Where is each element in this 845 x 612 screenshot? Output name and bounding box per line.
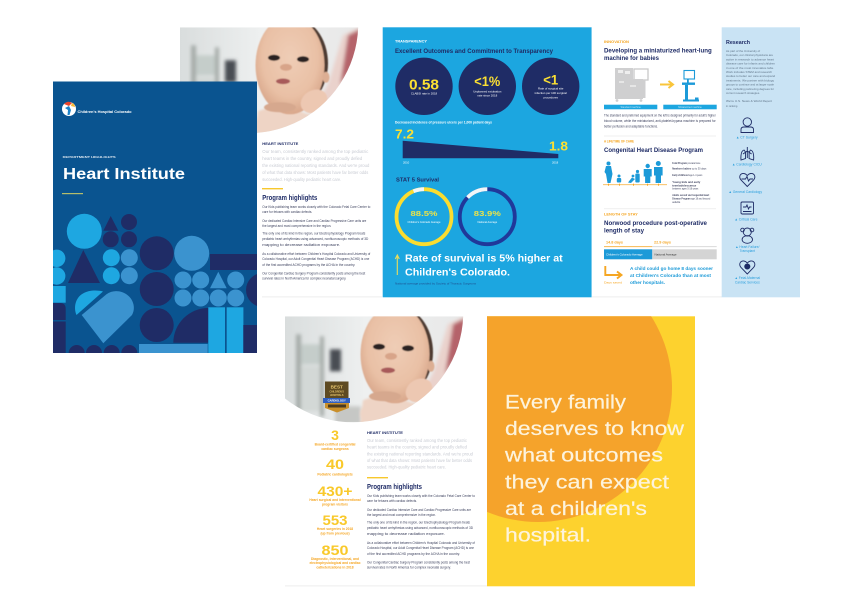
intro text: of what that data shows: Most patients have far better odds [262,170,369,175]
stat circle: less than 1 [522,58,579,115]
research body text: groups to continue and at larger scale [726,83,774,87]
icon: critical care monitor [741,202,754,214]
research body text: in one of the most innovative labs. [726,66,774,70]
donut: children's colorado 88.5: 88.5% [410,209,438,218]
label: department highlights: DEPARTMENT HIGHLIGHTS [63,155,116,159]
panel: inside left page [180,16,383,297]
intro text: of what that data shows: Most patients have far better odds [367,458,473,463]
donut: national 83.9: 83.9% [474,209,501,218]
badge: best children's hospitals: CARDIOLOGY [328,399,346,403]
quote text: Every family [505,391,626,413]
intro text: succeeded. High-quality pediatric heart care. [367,465,446,470]
intro text: Our team, consistently ranked among the top pediatric [367,438,468,443]
arrow: up [395,255,399,275]
heading: program highlights: Program highlights [262,193,317,202]
label: lifetime of care: A LIFETIME OF CARE [604,140,635,144]
callout: home sooner: at Children's Colorado than at most [630,273,711,279]
quote text [504,391,685,547]
callout: home sooner [630,266,713,286]
heading: research: Research [726,40,751,46]
research body text: current research strategies. [726,91,760,95]
stat: 40 cardiologists [317,456,353,476]
panel: lower brochure left page [285,305,487,586]
callout: survival rate: Children's Colorado. [405,267,510,278]
intro text [262,149,370,182]
highlights paragraphs: care for fetuses with cardiac defects. [262,210,312,214]
panel: research sidebar [722,27,800,297]
highlights paragraphs: mapping to decrease radiation exposure. [367,532,445,536]
quote text: they can expect [505,471,670,493]
intro text: heart teams in the country, signed and proudly defied [262,156,363,161]
program stages list: Fetal Program prenatal care [672,161,701,165]
stat circle: less than 1 percent [459,58,516,115]
highlights paragraphs: Our dedicated Cardiac Intensive Care and Cardiac Progressive Care units are [262,219,366,223]
innovation paragraph [604,113,717,128]
program stages list: Young kids and early [672,180,701,184]
chart: pressure ulcers decline: Decreased incidence of pressure ulcers per 1,000 patient days [395,120,492,124]
highlights paragraphs: of the first accredited ACHD programs by the ACHA in the country. [262,263,355,267]
panel: innovation page [592,27,722,297]
heading: norwood [604,220,707,234]
intro text: the existing national reporting standards. And we're proud [367,451,473,456]
baby photo [180,27,358,133]
bar: length of stay comparison: Children's Colorado Average [606,252,643,256]
donut: children's colorado 88.5: Children's Colorado Average [408,220,441,224]
intro text: succeeded. High-quality pediatric heart care. [262,177,341,182]
chart: pressure ulcers decline: 7.2 [395,127,414,141]
highlights paragraphs: of the first accredited ACHD programs by the ACHA in the country. [367,552,460,556]
label: CT surgery: ▲ CT Surgery [736,136,758,140]
chart: pressure ulcers decline: 2018 [552,160,559,164]
program stages list: adults [672,200,681,204]
heading: stat 5 survival: STAT 5 Survival [396,178,439,184]
footnote: National average provided by Society of Thoracic Surgeons [395,281,477,285]
highlights paragraphs: Our Congenital Cardiac Surgery Program consistently posts among the best [367,560,470,564]
heading: heart-lung machine: Developing a miniaturized heart-lung [604,47,712,54]
label: fetal-maternal: ▲ Fetal-Maternal [735,276,760,280]
stat circle: less than 1: infection per 100 surgical [535,91,567,95]
program stages list: Disease Program age 18 and beyond [672,196,711,200]
heading: norwood: length of stay [604,228,644,234]
label: heart failure [735,245,759,253]
label: innovation: INNOVATION [604,40,630,44]
stat: 553: 553 [322,512,348,528]
stat circle: less than 1: <1 [543,71,558,87]
badge: best children's hospitals: CHILDREN'S [329,390,344,394]
research body text: in ranking. [726,104,738,108]
chart: pressure ulcers decline [395,120,568,164]
intro text [367,438,473,470]
research body text: studies to better our care and expand [726,74,775,78]
highlights paragraphs: Our Congenital Cardiac Surgery Program consistently posts among the best [262,272,365,276]
highlights paragraphs [262,205,370,280]
donut: national 83.9 [460,189,515,244]
label: fetal-maternal: Cardiac Services [735,280,760,284]
bar labels: Standard machine [620,106,641,109]
innovation paragraph: blood volume, while the miniaturized, anti-platelet-bypass machine is prepared for [604,119,717,123]
yellow rule [367,477,388,478]
highlights paragraphs: As a collaborative effort between Children's Hospital Colorado and University of [262,252,370,256]
label: general cardiology: ▲ General Cardiology [728,190,762,194]
highlights paragraphs: the largest and most comprehensive in the region. [262,224,331,228]
stat circle: less than 1: procedures [543,95,558,99]
stat: 3 surgeons [315,427,356,451]
icon: large heart-lung machine [615,68,648,102]
highlights paragraphs: Our dedicated Cardiac Intensive Care and Cardiac Progressive Care units are [367,508,471,512]
bar: length of stay comparison: National Average [654,252,677,256]
highlights paragraphs: Colorado Hospital, our Adult Congenital Heart Disease Program (ACHD) is one [262,257,369,261]
highlights paragraphs [367,494,475,570]
stat: 430+: program visitors [322,502,348,506]
icon: heart with globe [740,261,755,274]
cover rule [62,193,83,194]
quote text: hospital. [505,525,591,547]
section label: heart institute: HEART INSTITUTE [367,430,403,435]
stat circle: 0.58: CLABSI rate in 2018 [411,91,438,95]
program stages list: between ages 5-18 years [672,187,699,191]
badge: best children's hospitals [323,382,350,412]
heading: outcomes: Excellent Outcomes and Commitment to Transparency [395,49,554,55]
chart: pressure ulcers decline: 2010 [403,160,410,164]
donut: national 83.9: National Average [477,220,498,224]
cover: heart institute brochure [53,82,257,353]
highlights paragraphs: pediatric heart arrhythmias using advanced, nonfluoroscopic methods of 3D [367,526,473,530]
stat: 850: electrophysiological and cardiac [309,561,361,565]
label: cardiology: ▲ Cardiology CICU [732,162,762,166]
stat: 850: catheterizations in 2018 [316,565,354,569]
stat: 3 surgeons: 3 [331,427,339,443]
highlights paragraphs: survival rates in North America for complex neonatal surgery. [367,566,451,570]
callout: home sooner: A child could go home 8 days sooner [630,266,713,272]
highlights paragraphs: Our Kids publishing team works closely with the Colorado Fetal Care Center to [262,205,370,209]
stat: 430+: 430+ [318,483,352,499]
stat: 553: (up from previous) [320,531,350,535]
cover pattern shapes [53,214,257,353]
bar labels: Miniaturized machine [678,106,702,109]
logo: Children's Hospital Colorado [78,109,132,114]
heading: program highlights: Program highlights [367,482,422,491]
intro text: heart teams in the country, signed and proudly defied [367,445,467,450]
research body text: active in research to advance heart [726,57,774,61]
innovation paragraph: The standard and preferred equipment on the left is designed primarily for adult's higher [604,113,717,117]
label: length of stay: LENGTH OF STAY [604,213,639,217]
program stages list: Early childhood age 1-4 years [672,173,703,177]
stat circle: less than 1 percent: <1% [474,73,501,89]
stat: 3 surgeons: Board-certified congenital [315,442,356,446]
research body text: treatments. We partner with biology [726,78,775,82]
quote text: deserves to know [505,418,685,440]
badge: best children's hospitals: HOSPITALS [330,394,344,397]
label: critical care: ▲ Critical Care [734,218,758,222]
orange circle [487,316,672,522]
heading: heart-lung machine [604,47,712,62]
arrow caption: Days saved [604,280,623,284]
research body text: We're U.S. News & World Report [726,99,772,103]
timeline [603,184,667,186]
icon: miniature machine [682,70,699,102]
callout: survival rate [405,254,563,278]
label: heart failure: Transplant [740,249,755,253]
research body text: As part of the University of [726,49,760,53]
callout: home sooner: other hospitals. [630,280,665,286]
stat: 40 cardiologists: Pediatric cardiologists [317,472,353,476]
badge: best children's hospitals: BEST [331,384,343,390]
icon row: people ages [604,161,663,183]
stat: 430+: Heart surgical and interventional [309,498,361,502]
panel: transparency (blue page) [383,27,592,297]
highlights paragraphs: survival rates in North America for complex neonatal surgery. [262,276,346,280]
quote text: at a children's [505,498,647,520]
highlights paragraphs: pediatric heart arrhythmias using advanced, nonfluoroscopic methods of 3D [262,237,369,241]
stat: 553 [317,512,353,535]
label: transparency: TRANSPARENCY [395,40,428,44]
highlights paragraphs: The only one of its kind in the region, our Electrophysiology Program treats [262,232,366,236]
icon: heart monitor [740,173,755,186]
highlights paragraphs: the largest and most comprehensive in the region. [367,513,436,517]
highlights paragraphs: care for fetuses with cardiac defects. [367,499,417,503]
highlights paragraphs: Our Kids publishing team works closely with the Colorado Fetal Care Center to [367,494,475,498]
stat: 553: Heart surgeries in 2018 [317,527,353,531]
highlights paragraphs: The only one of its kind in the region, our Electrophysiology Program treats [367,520,470,524]
program stages list: Adults served via Congenital Heart [672,193,709,197]
research body text [726,49,775,108]
label: fetal-maternal [735,276,760,284]
icon: teddy bear [741,228,754,243]
icon: CT surgery person [741,118,754,132]
intro text: the existing national reporting standards. And we're proud [262,163,370,168]
callout: survival rate: Rate of survival is 5% higher at [405,254,563,265]
stat circle: 0.58 [395,58,453,115]
stat circle: less than 1 percent: Unplanned extubation [473,89,502,93]
stat circle: less than 1 percent: rate since 2018 [477,94,498,98]
intro text: Our team, consistently ranked among the top pediatric [262,149,369,154]
heading: heart-lung machine: machine for babies [604,55,659,62]
program stages list [672,161,711,204]
quote text: what outcomes [504,445,663,467]
panel: quote page [487,316,695,586]
stat: 430+ [309,483,361,506]
heading: norwood: Norwood procedure post-operative [604,220,707,227]
highlights paragraphs: Colorado Hospital, our Adult Congenital Heart Disease Program (ACHD) is one [367,546,474,550]
label: heart failure: ▲ Heart Failure/ [735,245,759,249]
highlights paragraphs: mapping to decrease radiation exposure. [262,243,340,247]
highlights paragraphs: As a collaborative effort between Children's Hospital Colorado and University of [367,541,475,545]
donut: children's colorado 88.5 [396,189,452,244]
stat: 850 [309,542,361,569]
stat: 850: 850 [322,542,349,558]
bar labels [604,105,717,109]
program stages list: Newborn babies up to 30 days [672,166,707,170]
innovation paragraph: better perfusion and adaptable functions. [604,124,658,128]
logo [62,102,132,116]
chart: pressure ulcers decline: 1.8 [549,140,568,154]
stat circle: 0.58: 0.58 [409,76,439,93]
program stages list: teen/adolescence [672,183,697,187]
research body text: Work includes STEM and research [726,70,772,74]
bar: length of stay comparison: 14.8 days [606,241,623,245]
cover title: Heart Institute [63,166,185,183]
stat: 40 cardiologists: 40 [326,456,344,472]
yellow rule [262,188,283,189]
section label: heart institute: HEART INSTITUTE [262,141,299,146]
bar: length of stay comparison [604,241,717,259]
arrow: yellow [660,81,673,88]
research body text: Colorado, our clinical physicians are [726,53,773,57]
arrow: orange elbow [605,266,622,278]
research body text: disease care for infants and children [726,62,775,66]
stat: 3 surgeons: cardiac surgeons [321,447,349,451]
stat circle: less than 1: Rate of surgical site [538,86,564,90]
heading: congenital program: Congenital Heart Disease Program [604,147,703,154]
research body text: care, including partnering degrees for [726,87,774,91]
icon: lungs [741,147,754,160]
bar: length of stay comparison: 22.9 days [654,241,671,245]
stat: 850: Diagnostic, interventional, and [311,557,359,561]
baby photo [285,316,464,422]
